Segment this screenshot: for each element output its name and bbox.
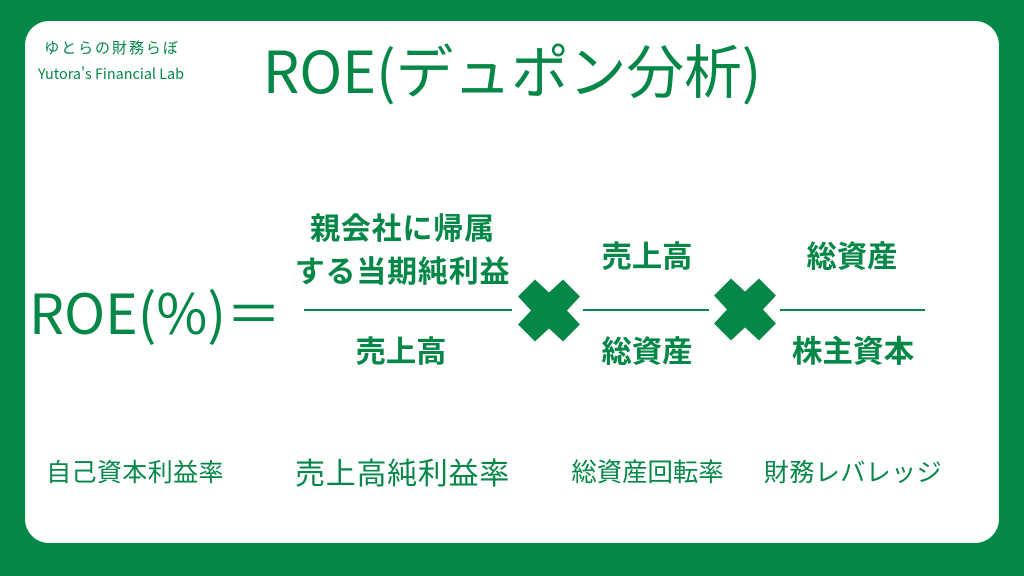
label: net profit margin: 売上高純利益率 <box>295 449 510 493</box>
fraction 3 line <box>780 309 925 311</box>
fraction 3 numerator: 総資産 <box>807 232 897 276</box>
fraction 2 line <box>583 309 709 311</box>
label: financial leverage: 財務レバレッジ <box>764 453 942 489</box>
label: return on equity: 自己資本利益率 <box>46 453 224 489</box>
icon: multiply 2 <box>714 278 776 340</box>
fraction 1 denominator: 売上高 <box>356 327 446 371</box>
formula left side: ROE(%)＝ <box>29 270 281 350</box>
title: ROE(デュポン分析) <box>263 26 761 110</box>
icon: multiply 1 <box>518 280 580 342</box>
brand name english: Yutora's Financial Lab <box>38 63 184 84</box>
label: asset turnover: 総資産回転率 <box>571 453 724 489</box>
brand name japanese: ゆとらの財務らぼ <box>44 37 180 58</box>
fraction 1 numerator <box>295 204 510 291</box>
fraction 2 numerator: 売上高 <box>602 232 692 276</box>
fraction 1 numerator: 親会社に帰属 <box>310 204 495 248</box>
fraction 2 denominator: 総資産 <box>602 327 692 371</box>
fraction 1 numerator: する当期純利益 <box>295 247 510 291</box>
fraction 3 denominator: 株主資本 <box>792 327 914 371</box>
fraction 1 line <box>304 309 512 311</box>
